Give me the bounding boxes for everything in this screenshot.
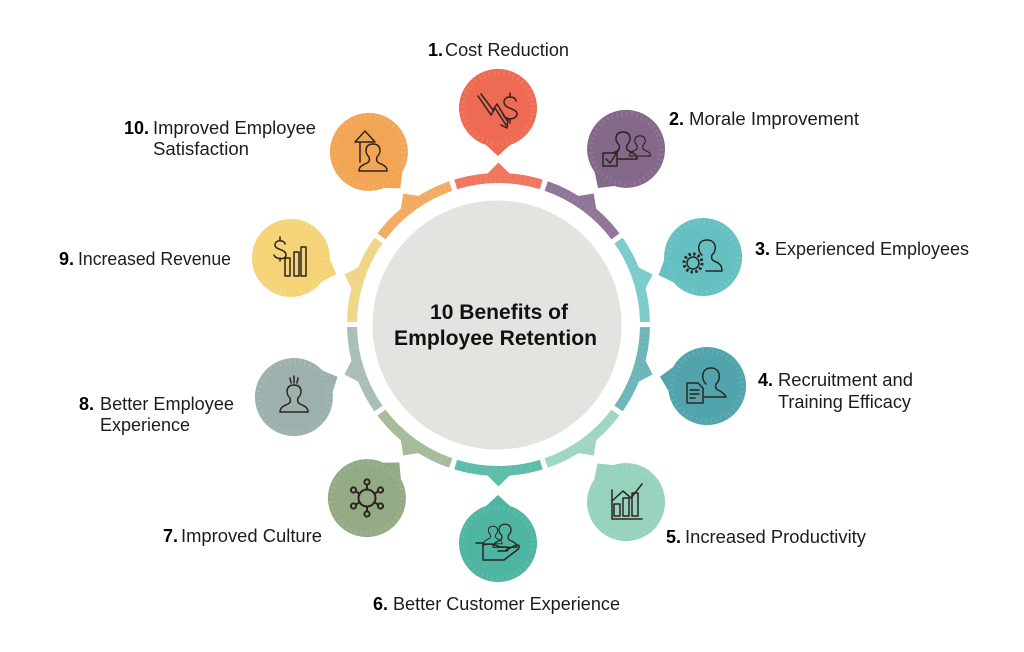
ring segment 1	[456, 162, 541, 184]
ring segment 4	[619, 327, 666, 415]
label 3: Experienced Employees	[775, 239, 969, 259]
label 2: Morale Improvement	[689, 109, 859, 129]
label 8	[79, 394, 234, 435]
label 8: Experience	[100, 415, 190, 435]
label 8: 8.	[79, 394, 94, 414]
label 5: 5.	[666, 527, 681, 547]
bubble 9: increased revenue	[241, 208, 349, 311]
ring segment 7	[369, 413, 451, 481]
label 9: 9.	[59, 249, 74, 269]
label 4: Training Efficacy	[778, 392, 911, 412]
title: 10 Benefits of	[430, 301, 569, 324]
label 4: Recruitment and	[778, 370, 913, 390]
bubble 8: better employee experience	[242, 341, 354, 449]
label 5: Increased Productivity	[685, 527, 866, 547]
ring segment 9	[331, 234, 378, 322]
label 6: 6.	[373, 594, 388, 614]
icon: network hub	[351, 479, 383, 517]
icon: falling arrow and dollar	[478, 93, 517, 128]
bubble 10: improved employee satisfaction	[314, 97, 430, 214]
icon: dollar and bars	[274, 237, 306, 276]
icon: person with up arrow	[355, 131, 387, 171]
label 1: Cost Reduction	[445, 40, 569, 60]
ring segment 5	[546, 413, 628, 481]
center circle	[372, 200, 622, 450]
ring segment 2	[546, 168, 628, 236]
icon: person with spark	[280, 376, 308, 412]
title: Employee Retention	[394, 327, 597, 350]
label 10: Satisfaction	[153, 139, 249, 159]
ring segment 8	[331, 327, 378, 415]
ring segment 10	[369, 168, 451, 236]
icon: two people and checkbox	[603, 132, 650, 166]
title	[394, 301, 597, 350]
icon: hand holding people	[476, 524, 519, 560]
label 2: 2.	[669, 109, 684, 129]
icon: person with document	[687, 368, 726, 403]
bubble 5: increased productivity	[566, 440, 681, 557]
bubble 3: experienced employees	[644, 206, 754, 311]
label 6: Better Customer Experience	[393, 594, 620, 614]
label 3: 3.	[755, 239, 770, 259]
label 10: Improved Employee	[153, 118, 316, 138]
label 4: 4.	[758, 370, 773, 390]
label 10: 10.	[124, 118, 149, 138]
label 1: 1.	[428, 40, 443, 60]
bubble 1: cost reduction	[459, 69, 537, 156]
bubble 4: recruitment and training efficacy	[652, 338, 753, 432]
label 8: Better Employee	[100, 394, 234, 414]
bubble 6: better customer experience	[459, 495, 537, 582]
label 4	[758, 370, 913, 412]
label 7: Improved Culture	[181, 526, 322, 546]
icon: person with gear	[684, 240, 722, 272]
ring segment 3	[619, 234, 666, 322]
label 7: 7.	[163, 526, 178, 546]
segmented ring	[331, 162, 666, 486]
label 9: Increased Revenue	[78, 249, 231, 269]
bubble 2: morale improvement	[566, 94, 680, 211]
ring segment 6	[456, 465, 541, 486]
bubble 7: improved culture	[312, 436, 428, 553]
label 10	[124, 118, 316, 159]
icon: bar chart with rising line	[612, 484, 642, 519]
